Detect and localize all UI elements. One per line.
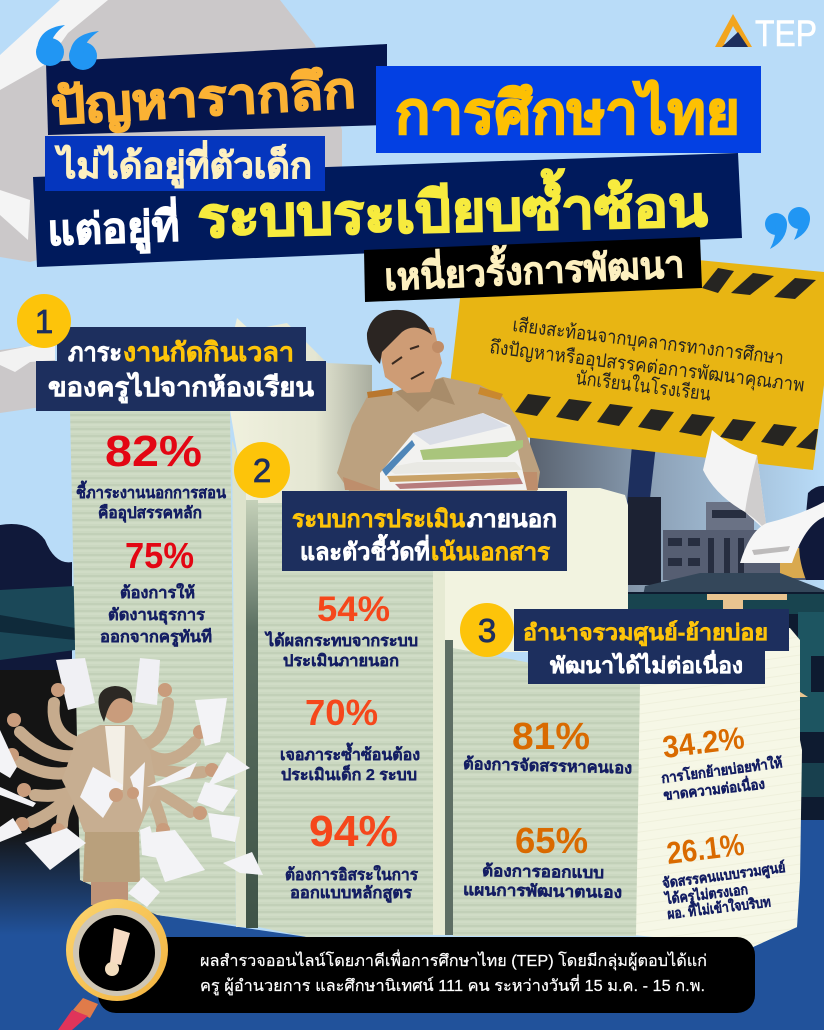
section 3 stats: 65% (515, 820, 588, 861)
section 2 heading: เน้นเอกสาร (431, 539, 550, 566)
background: dark lower left with tree and maze (0, 524, 160, 935)
section 3 heading (460, 603, 789, 684)
eyes and mouth (392, 346, 424, 379)
section 1 heading: งานกัดกินเวลา (123, 337, 294, 367)
section 2 stats: ออกแบบหลักสูตร (290, 884, 412, 904)
paper stack 3 (453, 628, 802, 947)
title line 4b: ระบบระเบียบซ้ำซ้อน (197, 165, 708, 249)
section 1 stats: 82% (105, 427, 202, 476)
survey note bar: ครู ผู้อำนวยการ และศึกษานิเทศน์ 111 คน ระหว่างวันที่ 15 ม.ค. - 15 ก.พ. (200, 974, 705, 996)
section 1 stats: ต้องการให้ (120, 583, 195, 602)
title line 2: การศึกษาไทย (395, 80, 740, 146)
hands on chest (109, 787, 139, 802)
section 2 stats: ได้ผลกระทบจากระบบ (264, 631, 418, 650)
section 3 stats: ได้ครูไม่ตรงเอก (663, 880, 749, 908)
section 3 stats: 34.2% (661, 720, 746, 765)
section 2 heading: 2 (253, 452, 271, 489)
title box blue (376, 66, 761, 153)
section 2 stats: ประเมินภายนอก (283, 652, 399, 670)
background: school building (628, 486, 824, 610)
section 3 stats: การโยกย้ายบ่อยทำให้ (660, 753, 783, 786)
face (380, 322, 442, 393)
section 2 heading: และตัวชี้วัดที่ (300, 533, 430, 566)
sign text: เสียงสะท้อนจากบุคลากรทางการศึกษา (511, 314, 785, 370)
arms (20, 703, 203, 825)
section 3 stats (463, 716, 786, 922)
icon: closing quote (765, 207, 810, 249)
section 1 stats: ออกจากครูทันที (100, 627, 212, 648)
background: sign pole (620, 445, 656, 584)
section 1 heading: 1 (35, 303, 53, 340)
back papers (56, 658, 160, 710)
forearms (343, 477, 380, 490)
section 2 stats: 70% (305, 692, 378, 733)
section 1 stats: คืออุปสรรคหลัก (98, 504, 202, 523)
logo (715, 13, 817, 54)
section 1 stats: ชี้ภาระงานนอกการสอน (76, 480, 226, 502)
section 2 stats: ประเมินเด็ก 2 ระบบ (281, 763, 417, 784)
section 3 heading: อำนาจรวมศูนย์-ย้ายบ่อย (523, 620, 768, 647)
title group (33, 44, 761, 302)
section 3 stats: ขาดความต่อเนื่อง (662, 774, 766, 803)
hair (367, 310, 432, 364)
title box main navy (33, 153, 742, 267)
section 2 stats: เจอภาระซ้ำซ้อนต้อง (280, 742, 420, 764)
paper stack 2 (258, 488, 628, 937)
papers around woman (0, 698, 263, 907)
section 3 heading: 3 (478, 612, 496, 649)
section 3 stats: ต้องการจัดสรรหาคนเอง (463, 755, 632, 777)
survey note bar: ผลสำรวจออนไลน์โดยภาคีเพื่อการศึกษาไทย (TEP) โดยมีกลุ่มผู้ตอบได้แก่ (200, 949, 707, 971)
title box black (364, 237, 702, 302)
body jacket skirt legs (91, 880, 128, 905)
section 1 heading (17, 294, 326, 411)
teacher man with paper stack (337, 310, 540, 492)
title box dark navy (46, 44, 387, 135)
section 3 stats: แผนการพัฒนาตนเอง (463, 881, 622, 902)
section 1 stats: ตัดงานธุรการ (108, 606, 205, 625)
section 1 heading: ของครูไปจากห้องเรียน (48, 371, 314, 404)
section 2 stats: 94% (309, 807, 398, 856)
section 2 stats: 54% (317, 590, 390, 629)
section 3 stats: ผอ. ที่ไม่เข้าใจบริบท (666, 891, 772, 922)
paper pile held by man (380, 413, 527, 490)
hazard stripes (515, 268, 818, 450)
section 1 stats (76, 427, 226, 648)
section 1 stats: 75% (125, 535, 194, 576)
icon: magnifier with exclamation (58, 899, 168, 1030)
background: grey haze behind the sign (530, 430, 824, 600)
background: grey mountain with snow (0, 0, 342, 413)
title line 1: ปัญหารากลึก (49, 62, 357, 136)
paper stack 1 (70, 318, 372, 928)
woman with many arms and papers (0, 658, 263, 907)
title line 4a: แต่อยู่ที่ (46, 196, 180, 257)
section 1 heading: ภาระ (68, 337, 122, 367)
title box blue small (45, 136, 325, 191)
background: lower blue field (0, 820, 824, 1030)
section 3 stats: 26.1% (665, 827, 746, 871)
title line 5: เหนี่ยวรั้งการพัฒนา (383, 237, 685, 298)
survey note bar (98, 937, 755, 1013)
section 3 stats: จัดสรรคนแบบรวมศูนย์ (661, 859, 786, 892)
section 3 heading: พัฒนาได้ไม่ต่อเนื่อง (550, 649, 743, 678)
yellow hazard sign (445, 238, 824, 470)
section 3 stats: ต้องการออกแบบ (482, 862, 604, 882)
section 2 heading: ระบบการประเมิน (292, 506, 466, 533)
section 2 stats: ต้องการอิสระในการ (285, 865, 418, 884)
title line 3: ไม่ได้อยู่ที่ตัวเด็ก (54, 140, 312, 189)
hands (5, 683, 219, 837)
section 2 heading: ภายนอก (467, 506, 557, 533)
shirt (337, 377, 540, 492)
background: maze right (628, 592, 824, 825)
sign text: นักเรียนในโรงเรียน (574, 366, 712, 406)
head (103, 693, 133, 723)
flying papers (703, 430, 824, 563)
section 3 stats: 81% (512, 716, 590, 758)
sign text (488, 314, 806, 406)
section 2 heading (234, 442, 567, 571)
icon: opening quote (36, 25, 99, 70)
section 2 stats (264, 590, 420, 904)
